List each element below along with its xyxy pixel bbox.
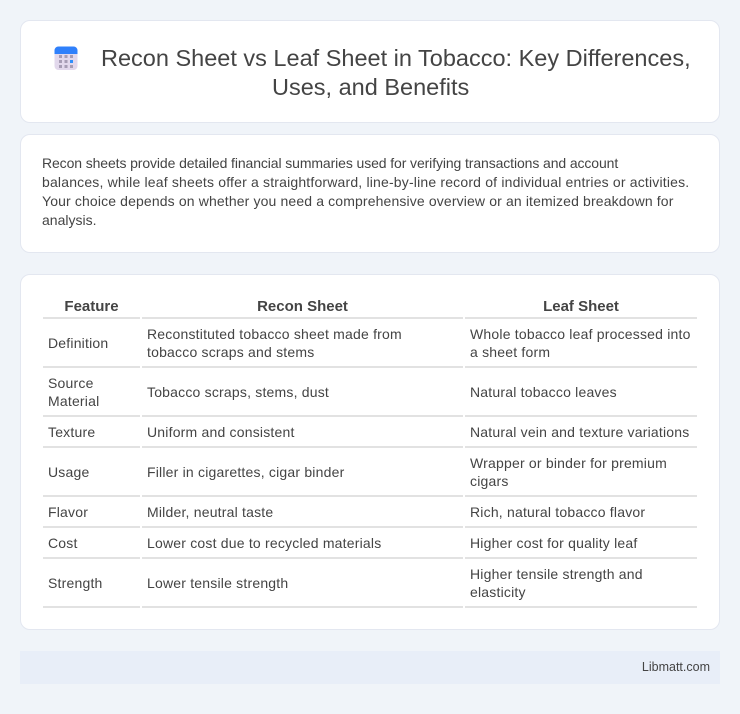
cell: leaf usage: cigars: [470, 473, 509, 489]
header: Recon Sheet: Recon Sheet: [257, 298, 348, 315]
cell: recon definition: Reconstituted tobacco sheet made from: [147, 326, 402, 342]
text block: summary: analysis.: [42, 212, 96, 228]
cell: leaf strength: [470, 566, 643, 600]
row: Flavor: Flavor: [48, 504, 88, 520]
cell: leaf definition: [470, 326, 691, 360]
row: Texture: Texture: [48, 424, 95, 440]
cell: recon texture: Uniform and consistent: [147, 424, 295, 440]
cell: leaf usage: Wrapper or binder for premium: [470, 455, 667, 471]
header: Feature: Feature: [64, 298, 119, 315]
cell: leaf strength: Higher tensile strength and: [470, 566, 643, 582]
row: Cost: Cost: [48, 535, 78, 551]
footer credit: Libmatt.com: [642, 660, 710, 674]
title: [101, 45, 691, 100]
cell: leaf strength: elasticity: [470, 584, 526, 600]
row: Source Material: Source: [48, 375, 94, 391]
panel: comparison table: [20, 274, 720, 630]
icon: calendar: [54, 46, 78, 70]
cell: leaf flavor: Rich, natural tobacco flavor: [470, 504, 645, 520]
cell: recon definition: [147, 326, 402, 360]
cell: recon source: Tobacco scraps, stems, dust: [147, 384, 329, 400]
cell: recon flavor: Milder, neutral taste: [147, 504, 273, 520]
title: Uses, and Benefits: [272, 74, 469, 100]
cell: recon cost: Lower cost due to recycled materials: [147, 535, 381, 551]
cell: recon usage: Filler in cigarettes, cigar binder: [147, 464, 344, 480]
panel: title card: [20, 20, 720, 123]
text block: summary: [42, 155, 689, 228]
cell: recon definition: tobacco scraps and stems: [147, 344, 314, 360]
cell: leaf texture: Natural vein and texture variations: [470, 424, 689, 440]
cell: recon strength: Lower tensile strength: [147, 575, 288, 591]
row: Definition: Definition: [48, 335, 108, 351]
cell: leaf source: Natural tobacco leaves: [470, 384, 617, 400]
panel: summary card: [20, 134, 720, 253]
cell: leaf definition: Whole tobacco leaf processed into: [470, 326, 691, 342]
row: Strength: Strength: [48, 575, 103, 591]
text block: summary: Recon sheets provide detailed financial summaries used for verifying transactions and account: [42, 155, 618, 171]
title: Recon Sheet vs Leaf Sheet in Tobacco: Key Differences,: [101, 45, 691, 71]
row: Source Material: [48, 375, 99, 409]
text block: summary: balances, while leaf sheets offer a straightforward, line-by-line record of individual entries or activities.: [42, 174, 689, 190]
footer: [20, 651, 720, 684]
cell: leaf usage: [470, 455, 667, 489]
cell: leaf definition: a sheet form: [470, 344, 550, 360]
cell: leaf cost: Higher cost for quality leaf: [470, 535, 637, 551]
row: Source Material: Material: [48, 393, 99, 409]
row: Usage: Usage: [48, 464, 89, 480]
header: Leaf Sheet: Leaf Sheet: [543, 298, 619, 315]
text block: summary: Your choice depends on whether you need a comprehensive overview or an itemized breakdown for: [42, 193, 674, 209]
